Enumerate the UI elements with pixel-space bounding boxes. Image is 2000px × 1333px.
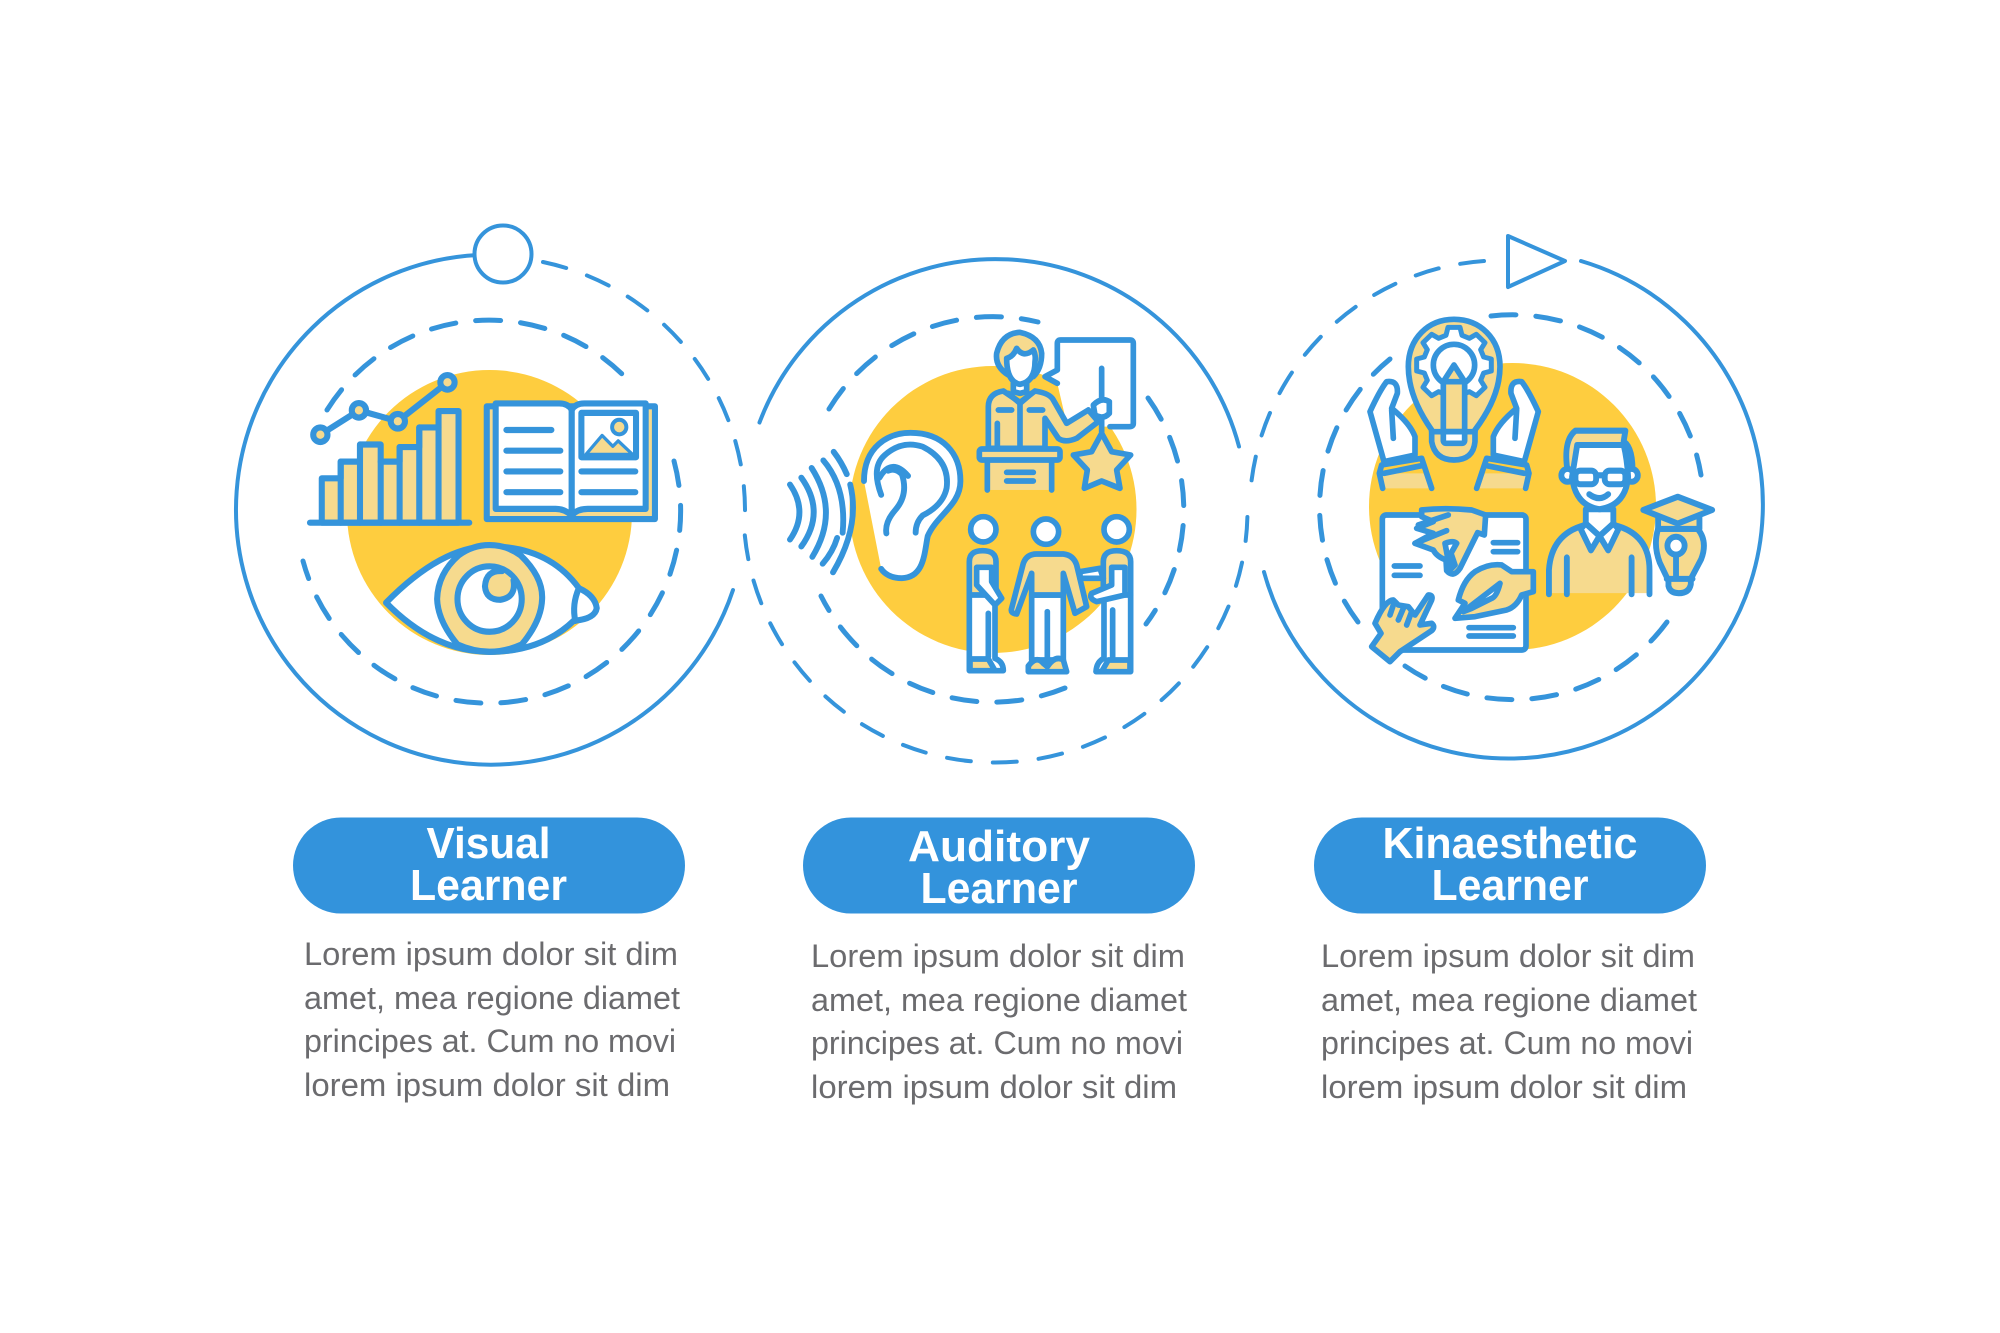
icon: ear: [864, 433, 960, 578]
yellow disc: auditory: [850, 366, 1136, 653]
panel: kinaesthetic learner circle: [1250, 236, 1763, 759]
heading pill: Kinaesthetic Learner: Kinaesthetic: [1382, 819, 1638, 868]
heading pill: Visual Learner: Learner: [410, 861, 567, 910]
outer ring: visual: [236, 255, 745, 765]
inner dashed ring: visual: [303, 320, 681, 703]
inner dashed ring: auditory: [821, 317, 1184, 702]
icon: bar chart with trend line: [310, 375, 469, 523]
icon: three students: [969, 517, 1131, 672]
outer ring: auditory: [744, 259, 1247, 762]
inner dashed ring: kinaesthetic: [1320, 315, 1701, 700]
panel: auditory learner circle: [744, 259, 1247, 762]
text block: kinaesthetic description: Lorem ipsum dolor sit dim: [1321, 938, 1695, 974]
icon: document with hands: [1372, 509, 1533, 662]
icon: open book: [487, 403, 655, 519]
heading pill: Kinaesthetic Learner: [1314, 818, 1706, 914]
text block: auditory description: [811, 938, 1187, 1105]
text block: visual description: [304, 936, 680, 1103]
text block: visual description: Lorem ipsum dolor sit dim: [304, 936, 678, 972]
outer ring: kinaesthetic: [1250, 261, 1763, 759]
icon: teacher at podium with board: [979, 332, 1133, 490]
text block: visual description: amet, mea regione diamet: [304, 980, 680, 1016]
heading pill: Kinaesthetic Learner: Learner: [1432, 861, 1588, 910]
panel: visual learner circle: [236, 226, 745, 765]
icon: graduation cap bulb: [1643, 497, 1712, 593]
heading pill: Auditory Learner: [803, 818, 1195, 914]
text block: auditory description: principes at. Cum no movi: [811, 1025, 1183, 1061]
icon: cupped hands: [1370, 381, 1538, 488]
text block: kinaesthetic description: [1321, 938, 1697, 1105]
text block: kinaesthetic description: principes at. Cum no movi: [1321, 1025, 1693, 1061]
text block: visual description: principes at. Cum no movi: [304, 1023, 676, 1059]
marker triangle: [1508, 236, 1565, 287]
heading pill: Visual Learner: [293, 818, 685, 914]
text block: kinaesthetic description: lorem ipsum dolor sit dim: [1321, 1069, 1687, 1105]
heading pill: Visual Learner: Visual: [426, 819, 550, 868]
text block: auditory description: amet, mea regione diamet: [811, 982, 1187, 1018]
marker circle: [474, 226, 532, 282]
icon: eye: [386, 545, 597, 652]
yellow disc: visual: [347, 370, 632, 655]
yellow disc: kinaesthetic: [1369, 363, 1656, 650]
text block: visual description: lorem ipsum dolor sit dim: [304, 1067, 670, 1103]
text block: auditory description: lorem ipsum dolor sit dim: [811, 1069, 1177, 1105]
text block: auditory description: Lorem ipsum dolor sit dim: [811, 938, 1185, 974]
heading pill: Auditory Learner: Auditory: [908, 822, 1091, 871]
icon: lightbulb with gear and pencil: [1408, 319, 1500, 460]
icon: sound waves: [790, 452, 853, 572]
text block: kinaesthetic description: amet, mea regione diamet: [1321, 982, 1697, 1018]
icon: student with glasses: [1549, 431, 1650, 594]
icon: star: [1073, 433, 1131, 488]
heading pill: Auditory Learner: Learner: [920, 864, 1078, 913]
